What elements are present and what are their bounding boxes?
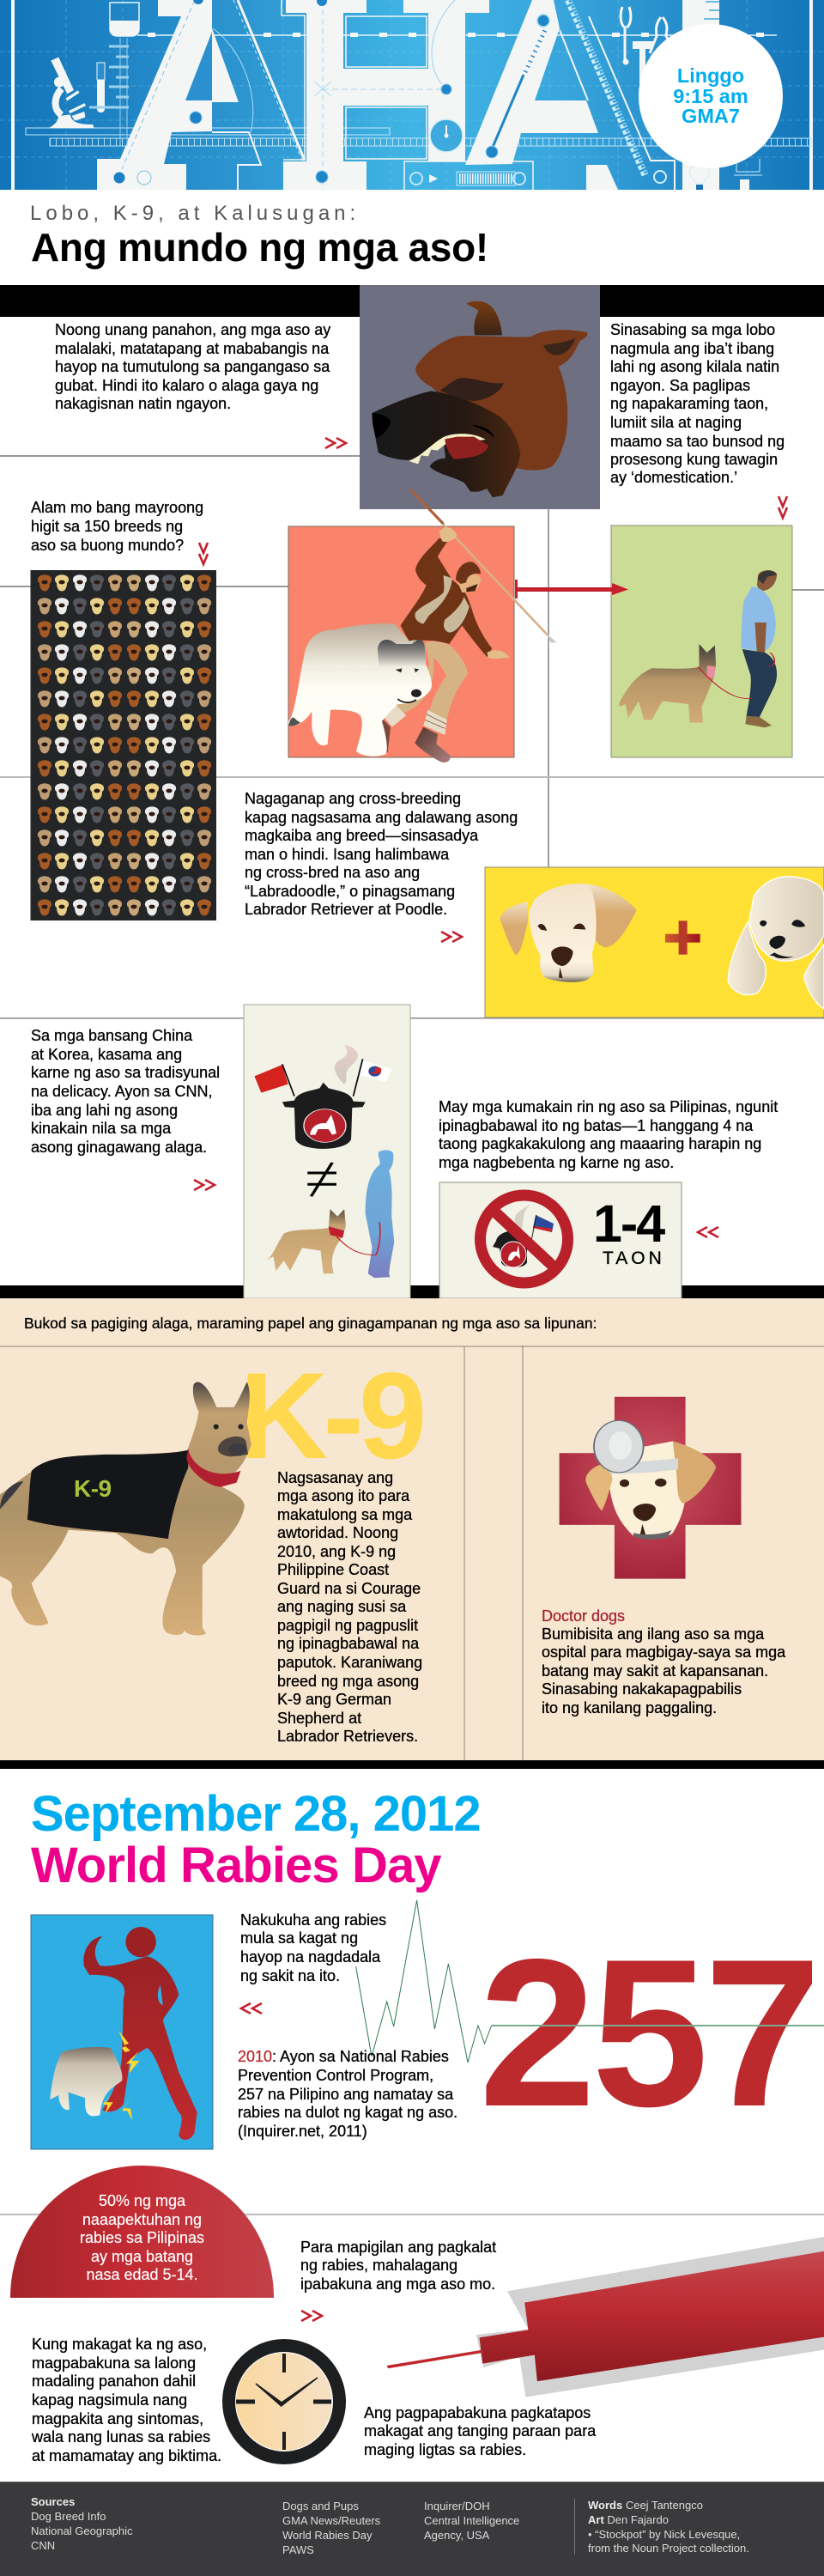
footer: sources column 3: Central Intelligence <box>424 2514 519 2527</box>
text: K-9 explanation: makatulong sa mga <box>277 1506 413 1523</box>
panel: Labrador plus Poodle <box>485 867 824 1018</box>
text: K-9 explanation: ang naging susi sa <box>277 1598 407 1615</box>
header: second letter A <box>465 0 675 190</box>
text: Doctor dogs: Bumibisita ang ilang aso sa mga <box>542 1625 765 1643</box>
text: cross-breeding: magkaiba ang breed—sinsasadya <box>245 827 479 844</box>
callout: 50 percent dome: 50% ng mga <box>99 2192 186 2209</box>
header: white strip and tools <box>621 0 762 190</box>
text: bitten, get vaccinated: kapag nagsimula nang <box>32 2391 187 2409</box>
icon: microscope <box>49 58 94 128</box>
arrow: double chevron down right column <box>779 496 787 518</box>
top black band <box>0 285 824 317</box>
arrow: double chevron left <box>698 1227 718 1237</box>
panel: roles of dogs <box>0 1298 824 1760</box>
illustration: K-9 German Shepherd <box>0 1382 251 1636</box>
text: rabies transmission: mula sa kagat ng <box>240 1929 358 1947</box>
black band above roles section <box>0 1285 824 1298</box>
text: 2010 statistic: 2010 <box>238 2048 272 2065</box>
icon: clock <box>222 2339 346 2464</box>
text: K-9 explanation: Nagsasanay ang <box>277 1469 393 1486</box>
black band below roles section <box>0 1760 824 1769</box>
text: domestication: lumiit sila at naging <box>610 414 742 431</box>
text: cross-breeding: Nagaganap ang cross-breeding <box>245 790 461 807</box>
panel: bitten person <box>31 1915 213 2149</box>
heading: roles intro: Bukod sa pagiging alaga, maraming papel ang ginagampanan ng mga aso sa lipunan: <box>24 1315 597 1332</box>
callout: 50 percent dome: naaapektuhan ng <box>82 2211 202 2228</box>
text: K-9 explanation: Guard na si Courage <box>277 1580 421 1597</box>
text: cross-breeding: kapag nagsasama ang dalawang asong <box>245 809 518 826</box>
title: World Rabies Day <box>31 1786 481 1893</box>
badge: schedule circle <box>639 24 783 168</box>
illustration: Labrador and Poodle heads <box>500 877 824 1009</box>
text: Philippine law: mga nagbebenta ng karne ng aso. <box>439 1154 674 1171</box>
text: 2010 statistic: rabies na dulot ng kagat ng aso. <box>238 2104 457 2121</box>
title block <box>30 202 488 270</box>
footer: sources column 2: GMA News/Reuters <box>282 2514 381 2527</box>
text: cross-breeding: Labrador Retriever at Poodle. <box>245 901 447 918</box>
footer: sources column 1: National Geographic <box>31 2524 133 2537</box>
arrow: red arrow between panels <box>515 580 628 598</box>
badge: schedule circle: GMA7 <box>682 105 740 127</box>
big number 257: 257 <box>479 1915 817 2150</box>
divider line <box>0 2214 824 2215</box>
title block: Ang mundo ng mga aso! <box>31 225 488 270</box>
text: Doctor dogs: batang may sakit at kapansanan. <box>542 1662 768 1680</box>
text: China and Korea: Sa mga bansang China <box>31 1027 193 1044</box>
footer: credits: Ceej Tantengco <box>622 2499 703 2512</box>
arrow: double chevron right <box>325 438 346 448</box>
text: early dogs: nakagisnan natin ngayon. <box>55 395 231 412</box>
text: K-9 explanation: K-9 ang German <box>277 1691 391 1708</box>
text: domestication: prosesong kung tawagin <box>610 451 778 468</box>
illustration: man riding wolf with spear <box>288 489 556 762</box>
panel: wolf head <box>360 285 600 509</box>
text: 150 breeds: Alam mo bang mayroong <box>31 499 203 516</box>
text: 2010 statistic: Prevention Control Program, <box>238 2067 433 2084</box>
text: Doctor dogs: Sinasabing nakakapagpabilis <box>542 1680 742 1698</box>
heading: K-9 big yellow: K-9 <box>239 1348 423 1485</box>
text: K-9 explanation: Labrador Retrievers. <box>277 1728 418 1745</box>
footer: sources column 3: Inquirer/DOH <box>424 2500 490 2512</box>
title: World Rabies Day: September 28, 2012 <box>31 1786 481 1842</box>
chart: heartbeat line <box>356 1900 824 2063</box>
footer: sources column 1: Sources <box>31 2495 75 2508</box>
text: bitten, get vaccinated: magpabakuna sa lalong <box>32 2354 196 2372</box>
callout: 50 percent dome: nasa edad 5-14. <box>86 2266 198 2283</box>
vest label: K-9 <box>74 1475 112 1502</box>
text: domestication: lahi ng asong kilala natin <box>610 358 779 375</box>
text: China and Korea: karne ng aso sa tradisyunal <box>31 1064 220 1081</box>
text: K-9 explanation: ng ipinagbabawal na <box>277 1635 420 1652</box>
arrow: double chevron down left column <box>199 543 208 564</box>
text: bitten, get vaccinated: at mamamatay ang biktima. <box>32 2447 221 2464</box>
panel: hunter and wolf <box>288 489 556 762</box>
text: China and Korea: asong ginagawang alaga. <box>31 1139 207 1156</box>
text: 150 breeds: aso sa buong mundo? <box>31 537 184 554</box>
text: rabies transmission: Nakukuha ang rabies <box>240 1911 386 1929</box>
text: Doctor dogs: Doctor dogs <box>542 1607 625 1625</box>
text: K-9 explanation: 2010, ang K-9 ng <box>277 1543 396 1560</box>
text: early dogs: gubat. Hindi ito kalaro o alaga gaya ng <box>55 377 318 394</box>
illustration: red figure bitten by dog <box>50 1927 197 2140</box>
icon: beaker and test tube <box>89 3 139 146</box>
text: vaccination: Para mapigilan ang pagkalat <box>300 2239 496 2256</box>
text: bitten, get vaccinated: wala nang lunas sa rabies <box>31 2428 210 2445</box>
footer: sources column 3: Agency, USA <box>424 2529 490 2542</box>
panel: grid of dog breeds <box>31 570 216 920</box>
header: horizontal rulers <box>26 33 811 146</box>
text: China and Korea: iba ang lahi ng asong <box>31 1102 178 1119</box>
text: K-9 explanation: pagpigil ng pagpuslit <box>277 1617 418 1634</box>
panel: 1-4 years penalty <box>439 1182 682 1298</box>
footer: credits: Den Fajardo <box>604 2513 669 2526</box>
text: China and Korea: na delicacy. Ayon sa CNN, <box>31 1083 212 1100</box>
penalty figure: TAON <box>603 1249 665 1268</box>
text: 2010 statistic: : Ayon sa National Rabies <box>272 2048 449 2065</box>
text: K-9 explanation: paputok. Karaniwang <box>277 1654 422 1671</box>
text: K-9 explanation: mga asong ito para <box>277 1487 410 1504</box>
text: vaccination: ipabakuna ang mga aso mo. <box>300 2275 495 2293</box>
text: K-9 explanation: awtoridad. Noong <box>277 1524 398 1541</box>
badge: schedule circle: Linggo <box>677 64 744 87</box>
text: domestication: Sinasabing sa mga lobo <box>610 321 775 338</box>
footer: sources column 2: Dogs and Pups <box>282 2500 359 2512</box>
text: domestication: nagmula ang iba’t ibang <box>610 340 774 357</box>
text: early dogs: malalaki, matatapang at mababangis na <box>55 340 330 357</box>
arrow: double chevron to syringe <box>301 2311 322 2321</box>
text: early dogs: Noong unang panahon, ang mga aso ay <box>55 321 330 338</box>
illustration: snarling wolf <box>373 301 587 497</box>
icon: prohibited stockpot <box>481 1195 568 1283</box>
footer: sources column 1: CNN <box>31 2539 55 2552</box>
arrow: double chevron left to panel <box>241 2003 262 2014</box>
text: K-9 explanation: Shepherd at <box>277 1710 361 1727</box>
text: vaccination: ng rabies, mahalagang <box>300 2257 457 2274</box>
footer: credits: • “Stockpot” by Nick Levesque, <box>588 2528 740 2541</box>
text: cross-breeding: man o hindi. Isang halimbawa <box>245 846 450 863</box>
callout: 50 percent dome: rabies sa Pilipinas <box>80 2229 204 2246</box>
footer: sources column 1: Dog Breed Info <box>31 2510 106 2523</box>
text: bitten, get vaccinated: magpakita ang sintomas, <box>32 2410 203 2427</box>
text: K-9 explanation: breed ng mga asong <box>277 1673 419 1690</box>
text: vaccination after bite: Ang pagpapabakuna pagkatapos <box>364 2404 591 2421</box>
text: cross-breeding: “Labradoodle,” o pinagsamang <box>245 883 455 900</box>
text: China and Korea: kinakain nila sa mga <box>31 1120 172 1137</box>
text: 2010 statistic: 257 na Pilipino ang namatay sa <box>238 2086 454 2103</box>
text: domestication: ay ‘domestication.’ <box>610 469 737 486</box>
header: first letter A <box>97 0 305 190</box>
arrow: double chevron to pot panel <box>194 1180 215 1190</box>
title: World Rabies Day: World Rabies Day <box>31 1838 441 1893</box>
text: domestication: ngayon. Sa paglipas <box>610 377 750 394</box>
illustration: stockpot, flags, not-equal, person and dog <box>254 1045 394 1278</box>
footer: credits: Art <box>588 2513 604 2526</box>
text: Doctor dogs: ospital para magbigay-saya sa mga <box>542 1643 786 1661</box>
footer <box>0 2482 824 2576</box>
arrow: double chevron to yellow panel <box>441 932 462 942</box>
text: Doctor dogs: ito ng kanilang paggaling. <box>542 1699 717 1716</box>
footer: sources column 2: World Rabies Day <box>282 2529 373 2542</box>
text: cross-breeding: ng cross-bred na aso ang <box>245 864 420 881</box>
text: domestication: maamo sa tao bunsod ng <box>610 433 785 450</box>
footer: credits: Words <box>588 2499 622 2512</box>
text: rabies transmission: ng sakit na ito. <box>240 1967 340 1984</box>
footer: credits: from the Noun Project collection. <box>588 2542 749 2555</box>
callout: 50 percent dome: ay mga batang <box>91 2248 193 2265</box>
title block: Lobo, K-9, at Kalusugan: <box>30 202 360 225</box>
footer: sources column 2: PAWS <box>282 2543 314 2556</box>
penalty figure: 1-4 <box>593 1194 665 1253</box>
illustration: doctor dog on red cross <box>560 1397 741 1579</box>
text: Philippine law: taong pagkakakulong ang maaaring harapin ng <box>439 1135 761 1152</box>
text: domestication: ng napakaraming taon, <box>610 395 768 412</box>
text: Philippine law: May mga kumakain rin ng aso sa Pilipinas, ngunit <box>439 1098 778 1115</box>
text: vaccination after bite: maging ligtas sa rabies. <box>364 2441 526 2458</box>
panel: domesticated dog and owner <box>611 526 792 757</box>
text: vaccination after bite: makagat ang tanging paraan para <box>364 2422 597 2439</box>
text: K-9 explanation: Philippine Coast <box>277 1561 389 1578</box>
header: letter H <box>282 0 533 190</box>
illustration: man walking german shepherd <box>619 570 777 727</box>
text: 150 breeds: higit sa 150 breeds ng <box>31 518 183 535</box>
text: Philippine law: ipinagbabawal ito ng batas—1 hanggang 4 na <box>439 1117 754 1134</box>
badge: schedule circle: 9:15 am <box>673 85 748 107</box>
text: China and Korea: at Korea, kasama ang <box>31 1046 182 1063</box>
callout: 50 percent dome <box>10 2166 274 2298</box>
illustration: syringe <box>387 2237 824 2397</box>
text: bitten, get vaccinated: madaling panahon dahil <box>32 2372 196 2390</box>
text: early dogs: hayop na tumutulong sa pangangaso sa <box>55 358 330 375</box>
text: bitten, get vaccinated: Kung makagat ka ng aso, <box>32 2336 207 2353</box>
panel: pot versus pet <box>244 1005 410 1298</box>
text: rabies transmission: hayop na nagdadala <box>240 1948 381 1965</box>
text: 2010 statistic: (Inquirer.net, 2011) <box>238 2123 367 2140</box>
